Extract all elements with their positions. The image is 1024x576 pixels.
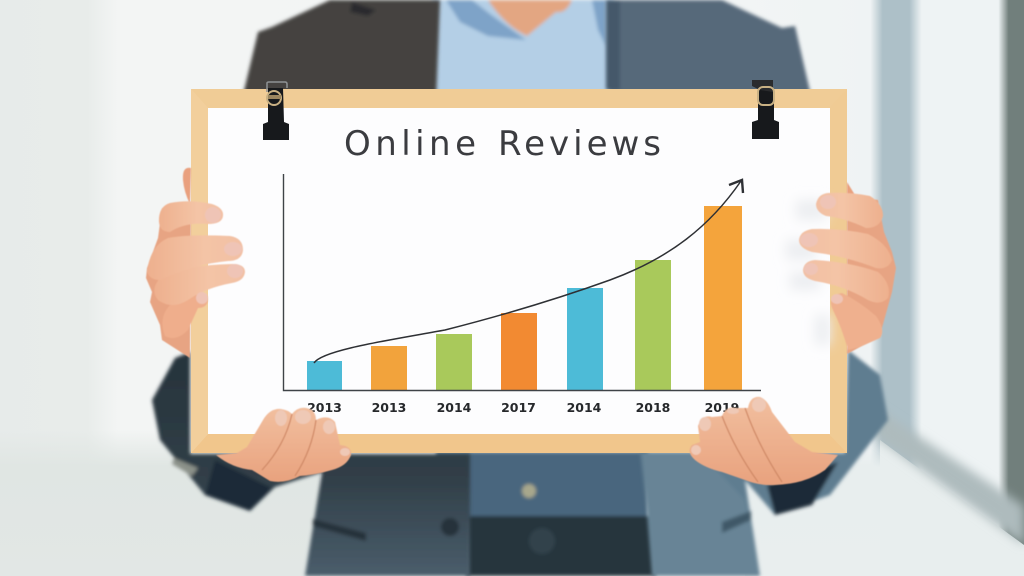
chart title: Reviews xyxy=(498,124,661,164)
person: jacket upper xyxy=(243,0,812,100)
bar 2014 blue xyxy=(567,288,603,390)
trend arrow xyxy=(314,180,743,363)
thumb behind frame xyxy=(847,182,855,200)
year labels: 2017 xyxy=(501,400,536,415)
right hand xyxy=(799,182,896,354)
finger 3 xyxy=(154,264,245,305)
year labels: 2019 xyxy=(705,400,739,415)
chart title xyxy=(344,124,661,164)
fingernails xyxy=(275,410,350,456)
finger 4 xyxy=(831,293,882,350)
left hand xyxy=(146,168,245,358)
palm xyxy=(847,195,896,354)
person: shirt xyxy=(432,0,656,576)
palm xyxy=(146,208,191,358)
bottom right hand xyxy=(690,397,838,485)
year labels: 2014 xyxy=(437,400,472,415)
left binder clip xyxy=(263,82,289,140)
bar 2017 dark orange xyxy=(501,313,537,390)
chart title: Online xyxy=(344,124,476,164)
fingernails xyxy=(196,207,243,304)
bar 2014 green xyxy=(436,334,472,390)
year labels xyxy=(307,400,739,415)
year labels: 2014 xyxy=(567,400,602,415)
knuckle shading xyxy=(262,414,316,476)
bar chart xyxy=(284,174,761,415)
chart axes xyxy=(284,174,761,390)
bar 2019 orange xyxy=(704,206,742,390)
bar 2013 orange xyxy=(371,346,407,390)
finger 1 xyxy=(816,193,883,228)
fingernails xyxy=(800,195,843,304)
finger 2 xyxy=(147,235,243,280)
finger 3 xyxy=(803,260,889,303)
finger 2 xyxy=(799,229,892,268)
person: jacket lower and sleeves xyxy=(152,350,888,576)
whiteboard frame xyxy=(191,89,847,453)
year labels: 2018 xyxy=(636,400,670,415)
knuckle shading xyxy=(722,408,782,482)
finger shadows on board xyxy=(786,200,830,345)
finger 4 xyxy=(162,293,208,338)
year labels: 2013 xyxy=(372,400,406,415)
right binder clip xyxy=(752,80,779,139)
bottom left hand xyxy=(216,408,351,482)
fingernails xyxy=(691,398,766,455)
finger 1 xyxy=(159,201,223,232)
year labels: 2013 xyxy=(307,400,342,415)
bar 2013 blue xyxy=(307,361,342,390)
thumb behind frame xyxy=(183,168,191,204)
bar 2018 green xyxy=(635,260,671,390)
